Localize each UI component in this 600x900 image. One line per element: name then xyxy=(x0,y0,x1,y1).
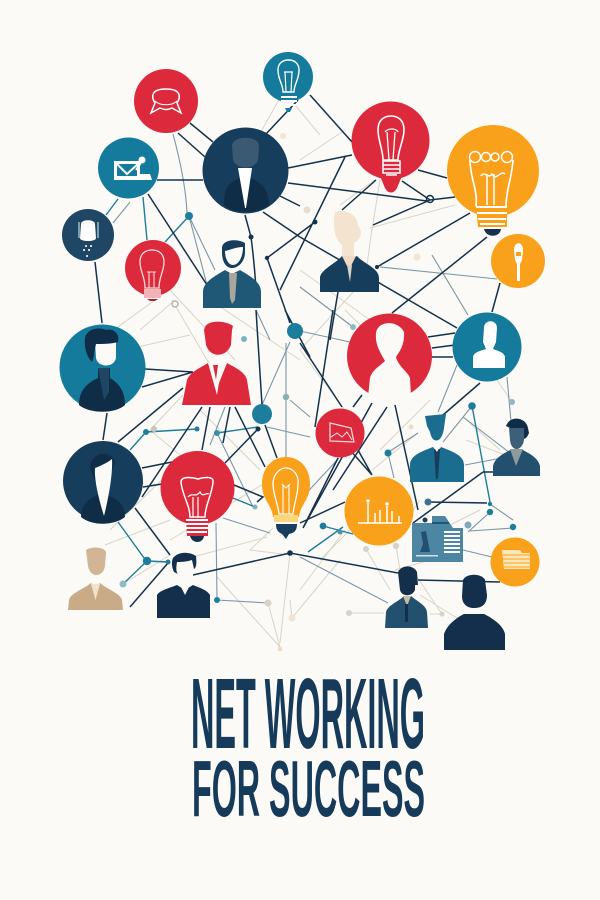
person: navy man with tie xyxy=(203,240,261,308)
icon: orange circle with folder xyxy=(490,538,540,586)
network nodes xyxy=(120,133,516,652)
person: teal businessman xyxy=(410,414,464,482)
icon: red circle with line chart xyxy=(316,408,364,458)
person: red businessman xyxy=(182,322,251,405)
icon: red circle with speech bubbles xyxy=(134,69,198,133)
icon: orange circle with pin xyxy=(491,234,545,288)
icon: red circle with large light bulb xyxy=(352,102,430,192)
icon: navy circle with woman xyxy=(63,441,143,524)
network: teal connection lines xyxy=(106,197,490,584)
icon: teal circle with man xyxy=(60,324,146,412)
icon: navy circle with phone xyxy=(62,209,114,261)
person: navy man with white face xyxy=(157,553,210,618)
icon: teal circle with person xyxy=(452,312,522,382)
icon: teal circle with envelope xyxy=(98,138,159,198)
icon: red circle with woman silhouette xyxy=(347,314,432,402)
person: large navy man xyxy=(444,575,505,650)
icon: orange circle with large light bulb xyxy=(447,125,539,236)
icon: red circle with light bulb xyxy=(125,240,181,301)
network: light connection lines xyxy=(100,96,512,647)
person: man with pale face xyxy=(320,211,379,292)
icon: teal circle with light bulb xyxy=(263,52,313,112)
icon: document with statue xyxy=(412,516,463,562)
person: beige man xyxy=(68,548,123,610)
person: woman in navy xyxy=(493,419,540,476)
network: dark navy connection lines xyxy=(95,95,500,607)
title xyxy=(191,658,425,833)
icon: navy circle with businessman xyxy=(202,128,288,214)
person: navy man with dark tie xyxy=(385,566,428,628)
network: grey-blue connection lines xyxy=(113,134,513,603)
icon: orange circle with bar chart xyxy=(344,476,414,546)
icon: red circle with light bulb xyxy=(160,451,234,542)
icon: orange standalone light bulb xyxy=(262,457,310,539)
